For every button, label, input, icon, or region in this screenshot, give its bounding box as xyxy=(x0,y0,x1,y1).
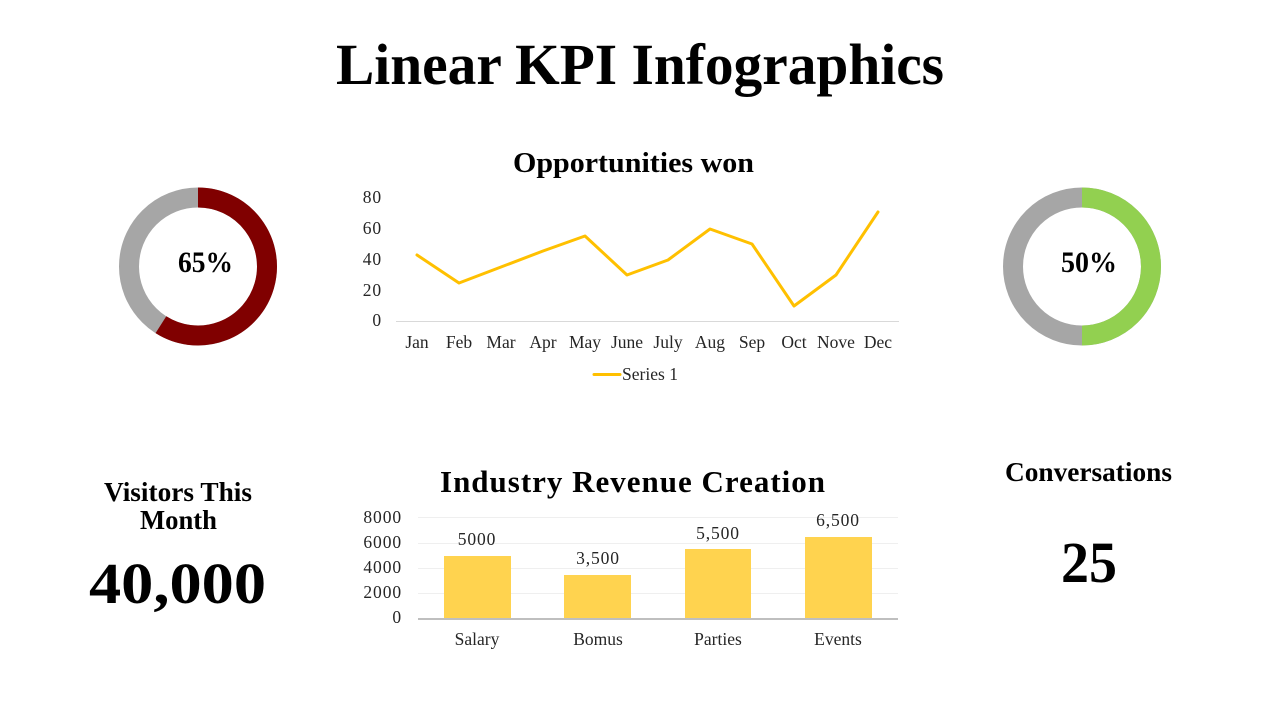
donut percentage: 65% xyxy=(178,246,233,279)
panel: industry revenue bar chart xyxy=(363,464,898,649)
y axis labels: 0 xyxy=(392,607,402,627)
x axis labels: Aug xyxy=(695,332,725,352)
panel: visitors this month xyxy=(89,477,266,616)
x axis labels: Sep xyxy=(739,332,765,352)
donut track xyxy=(1013,198,1151,336)
legend: Series 1 xyxy=(622,364,678,384)
bar value labels xyxy=(458,510,860,568)
y axis labels: 40 xyxy=(363,249,382,269)
x axis labels: June xyxy=(611,332,643,352)
x axis labels: Apr xyxy=(529,332,557,352)
y axis labels: 0 xyxy=(372,310,382,330)
donut track xyxy=(129,198,267,336)
x axis labels: Nove xyxy=(817,332,855,352)
panel: conversations xyxy=(1005,457,1172,595)
donut percentage: 50% xyxy=(1061,246,1117,279)
x axis labels: Bomus xyxy=(573,629,623,649)
panel: green donut 50% xyxy=(1013,198,1151,336)
x axis labels: May xyxy=(569,332,601,352)
bar value labels: 3,500 xyxy=(576,548,620,568)
x axis labels: Salary xyxy=(455,629,500,649)
x axis labels: Oct xyxy=(781,332,807,352)
x axis labels: Events xyxy=(814,629,862,649)
y axis labels: 2000 xyxy=(363,582,402,602)
bar value labels: 5000 xyxy=(458,529,496,549)
x axis labels: Dec xyxy=(864,332,892,352)
conversations label: Conversations xyxy=(1005,457,1172,487)
panel: opportunities won line chart xyxy=(363,147,899,384)
legend xyxy=(594,364,678,384)
y axis labels: 60 xyxy=(363,218,382,238)
donut value arc xyxy=(1082,198,1151,336)
x axis labels: Parties xyxy=(694,629,742,649)
x axis labels: Feb xyxy=(446,332,472,352)
visitors value: 40,000 xyxy=(89,551,266,616)
x axis labels: Mar xyxy=(486,332,516,352)
x axis labels xyxy=(405,332,892,352)
bars xyxy=(444,537,872,618)
visitors label: Visitors This xyxy=(104,477,252,507)
y axis labels xyxy=(363,507,402,627)
x axis labels: Jan xyxy=(405,332,429,352)
x axis labels xyxy=(455,629,862,649)
y axis labels: 80 xyxy=(363,187,382,207)
y axis labels: 4000 xyxy=(363,557,402,577)
chart heading: Industry Revenue Creation xyxy=(440,464,825,499)
line series xyxy=(417,212,878,306)
visitors label second line: Month xyxy=(140,505,217,535)
y axis labels: 20 xyxy=(363,280,382,300)
donut value arc xyxy=(161,198,267,336)
y axis labels xyxy=(363,187,382,330)
bar value labels: 6,500 xyxy=(816,510,860,530)
y axis labels: 6000 xyxy=(363,532,402,552)
bar value labels: 5,500 xyxy=(696,523,740,543)
conversations value: 25 xyxy=(1061,530,1117,595)
y axis labels: 8000 xyxy=(363,507,402,527)
chart heading: Opportunities won xyxy=(513,147,754,179)
panel: red donut 65% xyxy=(129,198,267,336)
title: Linear KPI Infographics xyxy=(336,32,944,97)
x axis labels: July xyxy=(653,332,683,352)
